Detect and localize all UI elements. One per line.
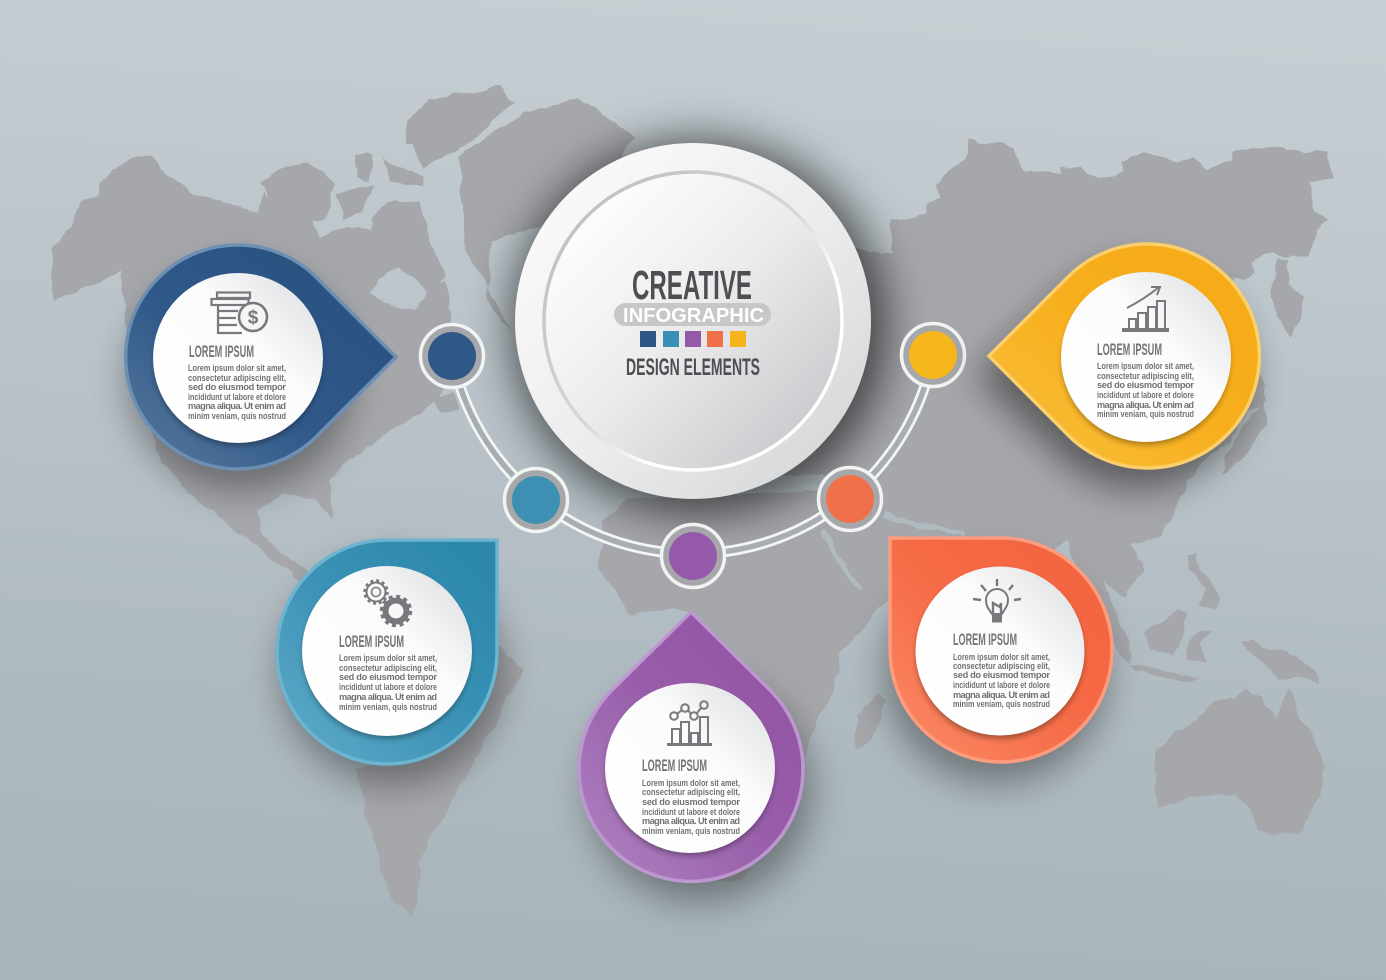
pin shadow: orange — [884, 560, 1108, 784]
subtitle pill: INFOGRAPHIC — [623, 304, 764, 327]
timeline node: yellow — [902, 324, 964, 386]
icon: coins with dollar: $ — [248, 308, 259, 328]
icon: growth chart — [1122, 287, 1169, 332]
subtitle: design elements: DESIGN ELEMENTS — [626, 354, 760, 381]
body text: Lorem ipsum dolor sit amet, — [642, 778, 740, 788]
heading: LOREM IPSUM — [189, 343, 254, 361]
body text: Lorem ipsum dolor sit amet, — [953, 652, 1050, 662]
body text: minim veniam, quis nostrud — [953, 699, 1050, 709]
timeline node: teal — [504, 468, 568, 532]
timeline connector — [452, 355, 933, 554]
body text: minim veniam, quis nostrud — [339, 702, 437, 712]
body text: magna aliqua. Ut enim ad — [188, 401, 286, 411]
body text: magna aliqua. Ut enim ad — [953, 690, 1050, 700]
body text: incididunt ut labore et dolore — [188, 392, 286, 402]
body text: consectetur adipiscing elit, — [339, 663, 437, 673]
body text: consectetur adipiscing elit, — [953, 661, 1050, 671]
body text — [642, 778, 740, 836]
body text: consectetur adipiscing elit, — [1097, 371, 1194, 381]
body text: sed do eiusmod tempor — [339, 672, 437, 682]
panel: purple pin — [579, 612, 803, 881]
body text: minim veniam, quis nostrud — [642, 826, 740, 836]
heading: LOREM IPSUM — [953, 631, 1017, 649]
body text: magna aliqua. Ut enim ad — [642, 816, 740, 826]
timeline node: orange — [818, 468, 882, 530]
timeline node: blue — [420, 324, 484, 388]
heading: LOREM IPSUM — [339, 633, 404, 651]
colour swatches — [640, 331, 746, 347]
body text: incididunt ut labore et dolore — [1097, 390, 1194, 400]
body text: magna aliqua. Ut enim ad — [339, 692, 437, 702]
body text: Lorem ipsum dolor sit amet, — [1097, 361, 1194, 371]
body text: sed do eiusmod tempor — [1097, 380, 1194, 390]
body text: sed do eiusmod tempor — [642, 797, 740, 807]
body text: sed do eiusmod tempor — [188, 382, 286, 392]
body text — [953, 652, 1050, 709]
body text: sed do eiusmod tempor — [953, 670, 1050, 680]
title: creative: CREATIVE — [632, 262, 752, 308]
heading: LOREM IPSUM — [642, 757, 707, 775]
body text: consectetur adipiscing elit, — [642, 787, 740, 797]
body text — [1097, 361, 1194, 419]
panel: orange pin — [890, 538, 1112, 762]
heading: LOREM IPSUM — [1097, 341, 1162, 359]
timeline node: purple — [662, 524, 724, 588]
body text — [188, 363, 286, 421]
icon: light bulb — [973, 579, 1021, 622]
body text: Lorem ipsum dolor sit amet, — [188, 363, 286, 373]
body text: minim veniam, quis nostrud — [188, 411, 286, 421]
icon: line and bar chart — [667, 701, 712, 746]
panel: blue pin — [126, 245, 396, 469]
pin shadow: blue — [128, 266, 352, 490]
body text: consectetur adipiscing elit, — [188, 373, 286, 383]
panel: yellow pin — [989, 244, 1259, 468]
icon: gears — [364, 580, 410, 626]
body text — [339, 653, 437, 712]
body text: incididunt ut labore et dolore — [953, 680, 1050, 690]
body text: incididunt ut labore et dolore — [642, 807, 740, 817]
pin shadow: yellow — [975, 265, 1250, 489]
icon: coins with dollar — [212, 292, 267, 333]
body text: Lorem ipsum dolor sit amet, — [339, 653, 437, 663]
body text: magna aliqua. Ut enim ad — [1097, 400, 1194, 410]
body text: minim veniam, quis nostrud — [1097, 409, 1194, 419]
central circle shadow — [511, 139, 887, 515]
panel: teal pin — [277, 540, 497, 764]
central circle — [515, 143, 871, 499]
body text: incididunt ut labore et dolore — [339, 682, 437, 692]
world map — [51, 87, 1334, 917]
pin shadow: purple — [588, 678, 812, 902]
pin shadow: teal — [280, 560, 504, 784]
